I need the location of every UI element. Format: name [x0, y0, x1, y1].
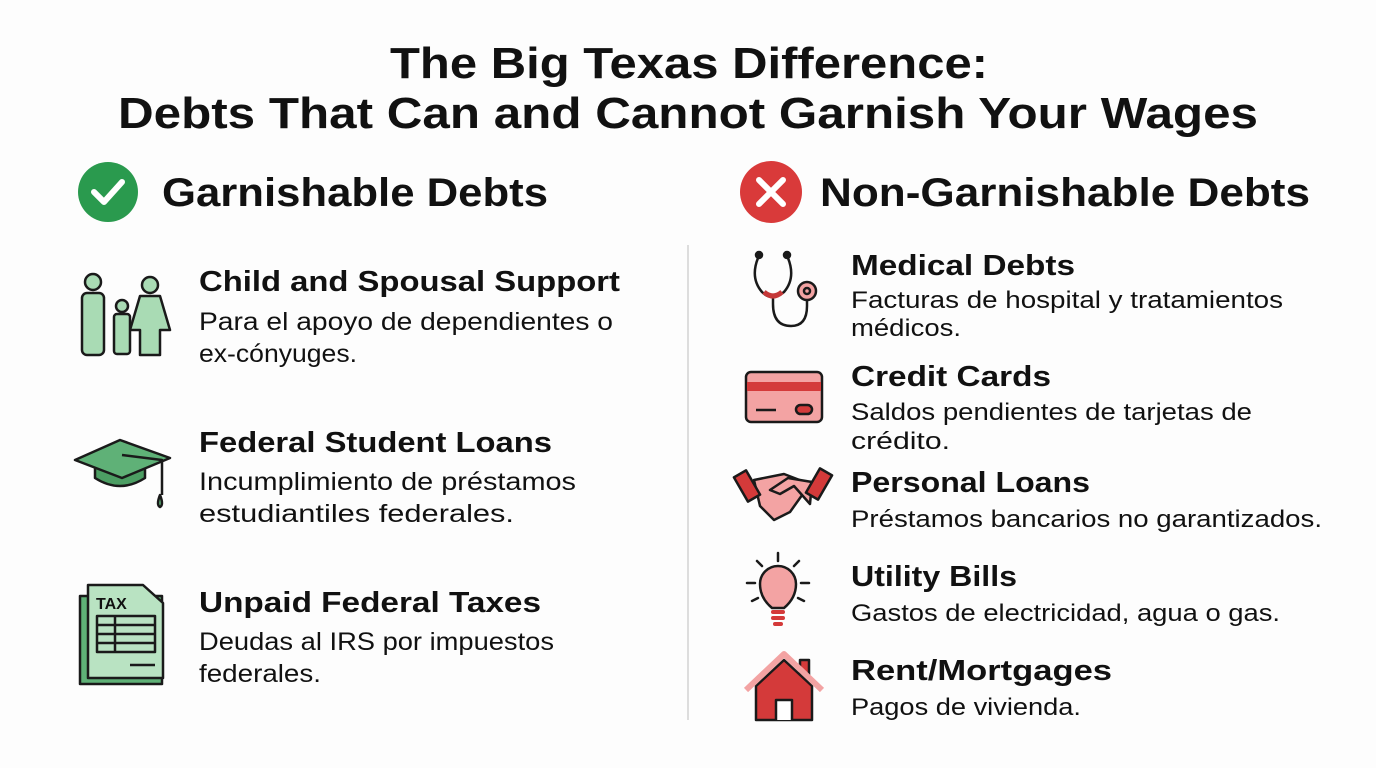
- item: rent: Rent/Mortgages: [851, 655, 1112, 687]
- item: medical: Medical Debts: [851, 250, 1075, 282]
- item: student loans: [75, 427, 576, 528]
- item: personal loans: Préstamos bancarios no garantizados.: [851, 506, 1322, 533]
- item: medical: Facturas de hospital y tratamientos: [851, 287, 1283, 314]
- item: rent: Pagos de vivienda.: [851, 694, 1081, 721]
- item: credit cards: Saldos pendientes de tarjetas de: [851, 399, 1252, 426]
- item: taxes: federales.: [199, 660, 321, 688]
- icon: grad cap: [75, 440, 170, 507]
- heading: non-garnishable: Non-Garnishable Debts: [820, 171, 1310, 215]
- item: utility: Gastos de electricidad, agua o gas.: [851, 600, 1280, 627]
- icon: bulb: [747, 553, 809, 624]
- item: utility: [747, 553, 1280, 627]
- item: student loans: Federal Student Loans: [199, 427, 552, 459]
- heading: garnishable: Garnishable Debts: [162, 171, 548, 215]
- title: Debts That Can and Cannot Garnish Your Wages: [118, 89, 1258, 138]
- item: utility: Utility Bills: [851, 561, 1017, 593]
- item: taxes: Unpaid Federal Taxes: [199, 587, 541, 619]
- icon: check: [78, 162, 138, 222]
- item: child support: Para el apoyo de dependientes o: [199, 308, 613, 336]
- icon: x: [740, 161, 802, 223]
- title: [118, 39, 1258, 138]
- item: credit cards: Credit Cards: [851, 361, 1051, 393]
- item: child support: [82, 266, 620, 368]
- item: taxes: Deudas al IRS por impuestos: [199, 628, 554, 656]
- icon: house: [746, 654, 822, 720]
- item: child support: ex-cónyuges.: [199, 340, 357, 368]
- icon: handshake: [734, 468, 832, 520]
- item: student loans: estudiantiles federales.: [199, 500, 514, 528]
- icon: tax doc: [80, 585, 163, 684]
- icon: family: [82, 274, 170, 355]
- icon: tax doc: TAX: [96, 596, 127, 613]
- icon: card: [746, 372, 822, 422]
- icon: stethoscope: [755, 252, 816, 326]
- item: credit cards: crédito.: [851, 428, 950, 455]
- item: credit cards: [746, 361, 1252, 455]
- item: student loans: Incumplimiento de préstamos: [199, 468, 576, 496]
- item: child support: Child and Spousal Support: [199, 266, 620, 298]
- item: personal loans: Personal Loans: [851, 467, 1090, 499]
- item: medical: médicos.: [851, 315, 961, 342]
- item: medical: [755, 250, 1283, 342]
- item: taxes: [80, 585, 554, 688]
- item: personal loans: [734, 467, 1322, 533]
- title: The Big Texas Difference:: [390, 39, 988, 88]
- item: rent: [746, 654, 1112, 721]
- heading: non-garnishable: [740, 161, 1310, 223]
- heading: garnishable: [78, 162, 548, 222]
